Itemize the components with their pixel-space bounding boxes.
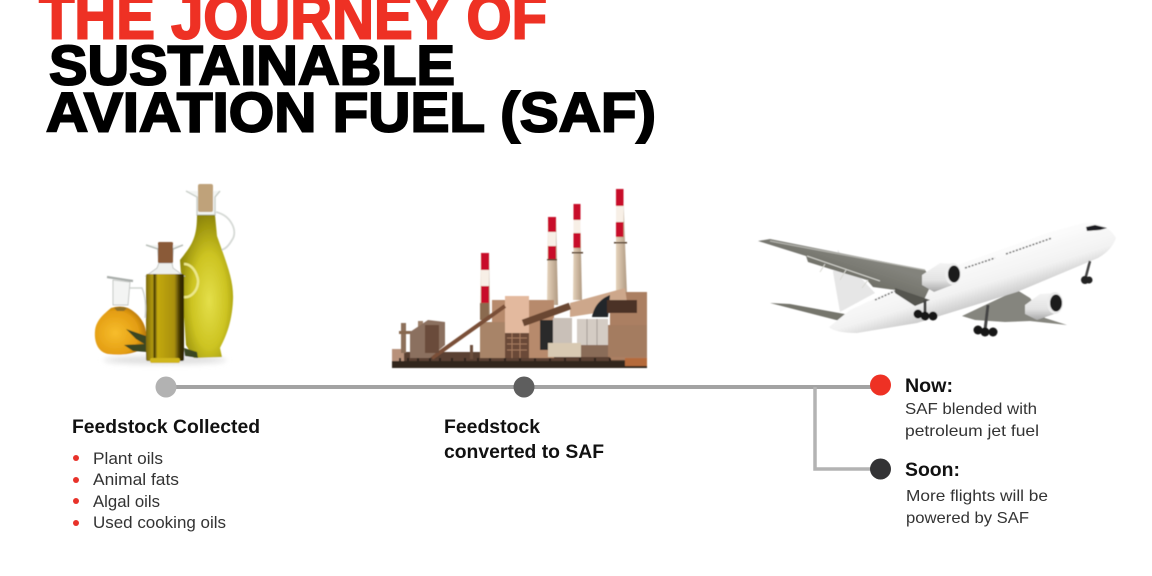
horizontal stabilizer <box>770 303 850 321</box>
feedstock list <box>73 450 226 532</box>
main gear far <box>974 305 998 336</box>
chimney 2 <box>547 217 558 305</box>
timeline dot: soon <box>870 458 891 480</box>
icon: refinery <box>392 189 647 368</box>
text block: now: SAF blended with <box>905 401 1037 418</box>
feedstock list: Used cooking oils <box>93 514 226 532</box>
near wing <box>758 239 933 302</box>
icon: oil bottles <box>95 184 234 364</box>
feedstock list: Animal fats <box>93 471 179 489</box>
heading: feedstock converted <box>444 416 604 463</box>
text block: soon: Soon: <box>905 459 960 481</box>
icon: airplane <box>758 223 1116 336</box>
title: SUSTAINABLE <box>49 34 455 96</box>
timeline dot: now <box>870 374 891 396</box>
title <box>39 0 656 144</box>
text block: now: petroleum jet fuel <box>905 423 1039 440</box>
engine 2 <box>1025 292 1063 320</box>
text block: soon <box>905 459 1048 527</box>
text block: soon: More flights will be <box>906 488 1048 505</box>
engine 1 <box>922 263 961 292</box>
tail fin <box>833 250 875 312</box>
chimney 1 <box>480 253 490 320</box>
fuselage <box>829 223 1116 333</box>
chimney 4 <box>614 189 627 295</box>
text block: now <box>905 375 1039 440</box>
timeline connector <box>166 387 880 469</box>
timeline dot: feedstock collected <box>156 376 176 398</box>
title: AVIATION FUEL (SAF) <box>46 80 656 144</box>
cabin windows <box>875 238 1052 300</box>
timeline dot: converted <box>514 376 534 398</box>
cockpit window <box>1086 225 1107 231</box>
text block: now: Now: <box>905 375 953 397</box>
heading: feedstock converted: converted to SAF <box>444 441 604 463</box>
main gear near <box>914 300 938 320</box>
feedstock list: Plant oils <box>93 450 163 468</box>
heading: feedstock converted: Feedstock <box>444 416 540 438</box>
nose gear <box>1081 261 1092 284</box>
far wing <box>962 290 1067 325</box>
chimney 3 <box>572 204 583 300</box>
feedstock list: Algal oils <box>93 493 160 511</box>
heading: feedstock collected: Feedstock Collected <box>72 416 260 438</box>
text block: soon: powered by SAF <box>906 510 1029 527</box>
